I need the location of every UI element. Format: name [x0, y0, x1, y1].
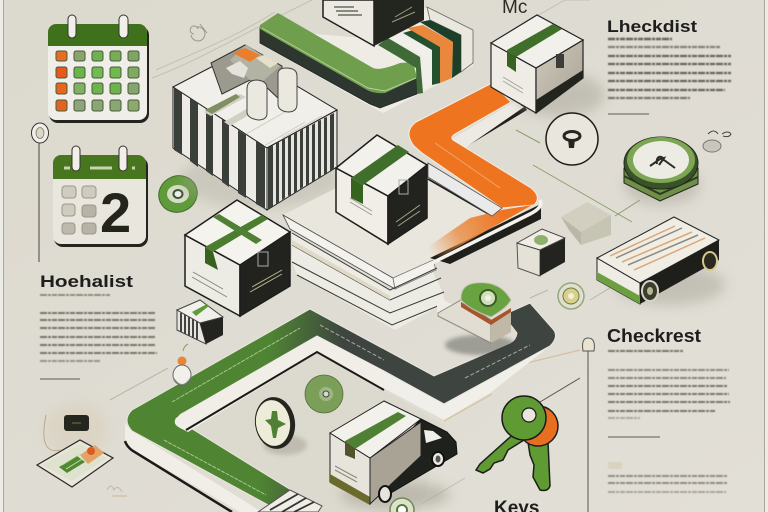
- heading: checklist top: Lheckdist: [607, 17, 697, 36]
- panel: lower right checkrest: [607, 326, 730, 492]
- underline: top right: [608, 113, 649, 115]
- small circle icon: [558, 283, 584, 309]
- green disk: [305, 375, 343, 413]
- box: top partial: [323, 0, 424, 46]
- keys: [476, 396, 558, 490]
- small doodle: bottom: [107, 486, 127, 496]
- small tablet icon: [37, 415, 113, 487]
- road: green and dark: [125, 303, 556, 512]
- body text lines: [608, 39, 731, 98]
- panel: left hoehalist: [40, 272, 157, 361]
- truck: bottom: [330, 401, 457, 512]
- underline: left: [40, 378, 80, 380]
- small striped box: [177, 300, 223, 344]
- badge: green round: [153, 169, 203, 219]
- calendar: number 2: [53, 146, 148, 247]
- small box: centre right: [517, 229, 565, 276]
- calendar: top: [48, 15, 149, 123]
- ribbon road: top green: [260, 7, 473, 113]
- pin marker: left: [32, 123, 48, 262]
- faded text lines: [608, 476, 728, 492]
- small doodle icons right: [703, 131, 731, 152]
- box: left middle: [185, 200, 290, 316]
- paper strip: bottom: [258, 490, 322, 512]
- body text lines: [40, 295, 157, 361]
- paper stack: [283, 185, 470, 330]
- stacked rollers on block: [211, 45, 297, 120]
- heading: lower right: Checkrest: [607, 326, 701, 346]
- underline: lower right: [608, 436, 660, 438]
- panel: top right checklist: [607, 17, 731, 98]
- coin: green cross: [252, 394, 307, 455]
- box: upper right: [491, 15, 605, 117]
- pin with long line: right panel: [583, 338, 594, 512]
- calendar: number 2: 2: [100, 181, 131, 244]
- van: right: [597, 217, 725, 305]
- beige cube: [561, 202, 611, 245]
- box: centre: [336, 135, 427, 244]
- block with green button on road: [437, 283, 515, 355]
- circle icon: key: [546, 113, 598, 165]
- heading: left: Hoehalist: [40, 272, 133, 291]
- small doodle: top: [190, 3, 236, 41]
- orange path: [409, 83, 541, 272]
- gauge: [624, 137, 700, 205]
- body text lines: [608, 351, 730, 418]
- knob: road start: [173, 344, 191, 385]
- striped block: [173, 52, 340, 210]
